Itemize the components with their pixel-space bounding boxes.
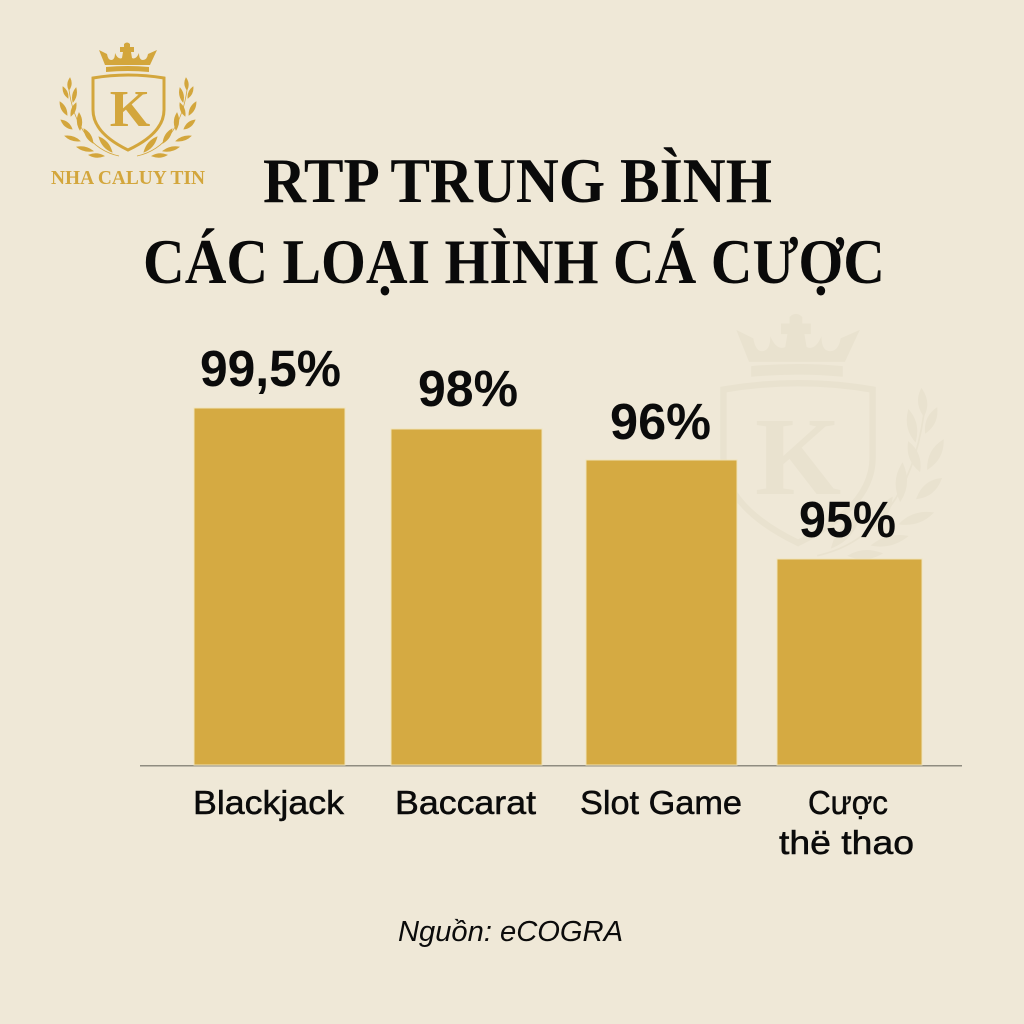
logo text: NHA CALUY TIN: [51, 167, 206, 189]
axis line: [140, 765, 962, 766]
icon: crown band: [106, 66, 149, 72]
label: Slot Game: Slot Game: [580, 784, 742, 821]
title line 2: CÁC LOẠI HÌNH CÁ CƯỢC: [143, 226, 885, 297]
icon: left laurel: [60, 78, 119, 157]
label: Baccarat: Baccarat: [395, 784, 536, 821]
source note: Nguồn: eCOGRA: [398, 916, 623, 948]
value: Baccarat: 98%: [418, 360, 518, 417]
watermark crown band: [751, 364, 843, 377]
bar chart: [140, 340, 962, 861]
value: Slot Game: 96%: [610, 393, 711, 450]
icon: right laurel: [137, 78, 196, 157]
watermark shield: [723, 383, 873, 543]
bar: Slot Game: [586, 460, 737, 765]
icon: crown: [99, 42, 157, 65]
watermark K: K: [755, 395, 841, 518]
bar: Cược thể thao: [777, 559, 922, 765]
title: [143, 145, 885, 297]
label: Blackjack: Blackjack: [193, 784, 345, 821]
title line 1: RTP TRUNG BÌNH: [263, 145, 772, 216]
value: Cược thể thao: 95%: [799, 491, 896, 548]
watermark crown: [736, 314, 860, 362]
label: Cược thể thao: Cược: [808, 784, 888, 821]
bar: Baccarat: [391, 429, 542, 765]
bar: Blackjack: [194, 408, 345, 765]
logo: [51, 42, 206, 189]
label: Cược thể thao line 2: thë thao: [779, 824, 914, 861]
icon: shield: [93, 75, 164, 150]
logo letter K: K: [110, 81, 151, 138]
watermark logo: [723, 314, 943, 558]
watermark right laurel: [817, 390, 943, 558]
value: Blackjack: 99,5%: [200, 340, 341, 397]
